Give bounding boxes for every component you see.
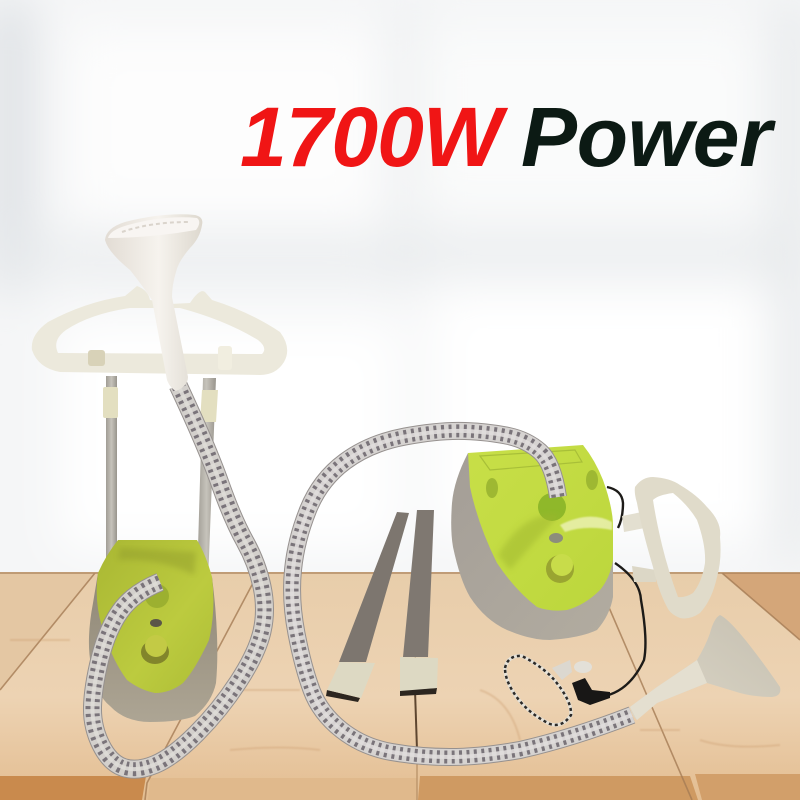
right steamer: hose	[292, 431, 632, 757]
title	[240, 90, 776, 184]
right steamer: plug and small cord	[505, 656, 610, 725]
left steamer: steam head	[105, 214, 202, 391]
left steamer: hanger	[32, 286, 287, 375]
left steamer: poles	[103, 376, 218, 586]
background: blurred window	[0, 0, 800, 575]
right steamer: power cord	[605, 487, 645, 696]
right steamer: base unit	[451, 445, 613, 640]
left steamer: base unit	[89, 540, 217, 722]
left steamer: hose	[92, 385, 264, 769]
title: Power	[521, 90, 772, 184]
right steamer: detached poles	[326, 510, 438, 702]
wooden table	[0, 572, 800, 800]
right steamer: steam head	[630, 615, 780, 720]
right steamer: detached hanger	[622, 477, 721, 618]
title: 1700W	[240, 90, 501, 184]
